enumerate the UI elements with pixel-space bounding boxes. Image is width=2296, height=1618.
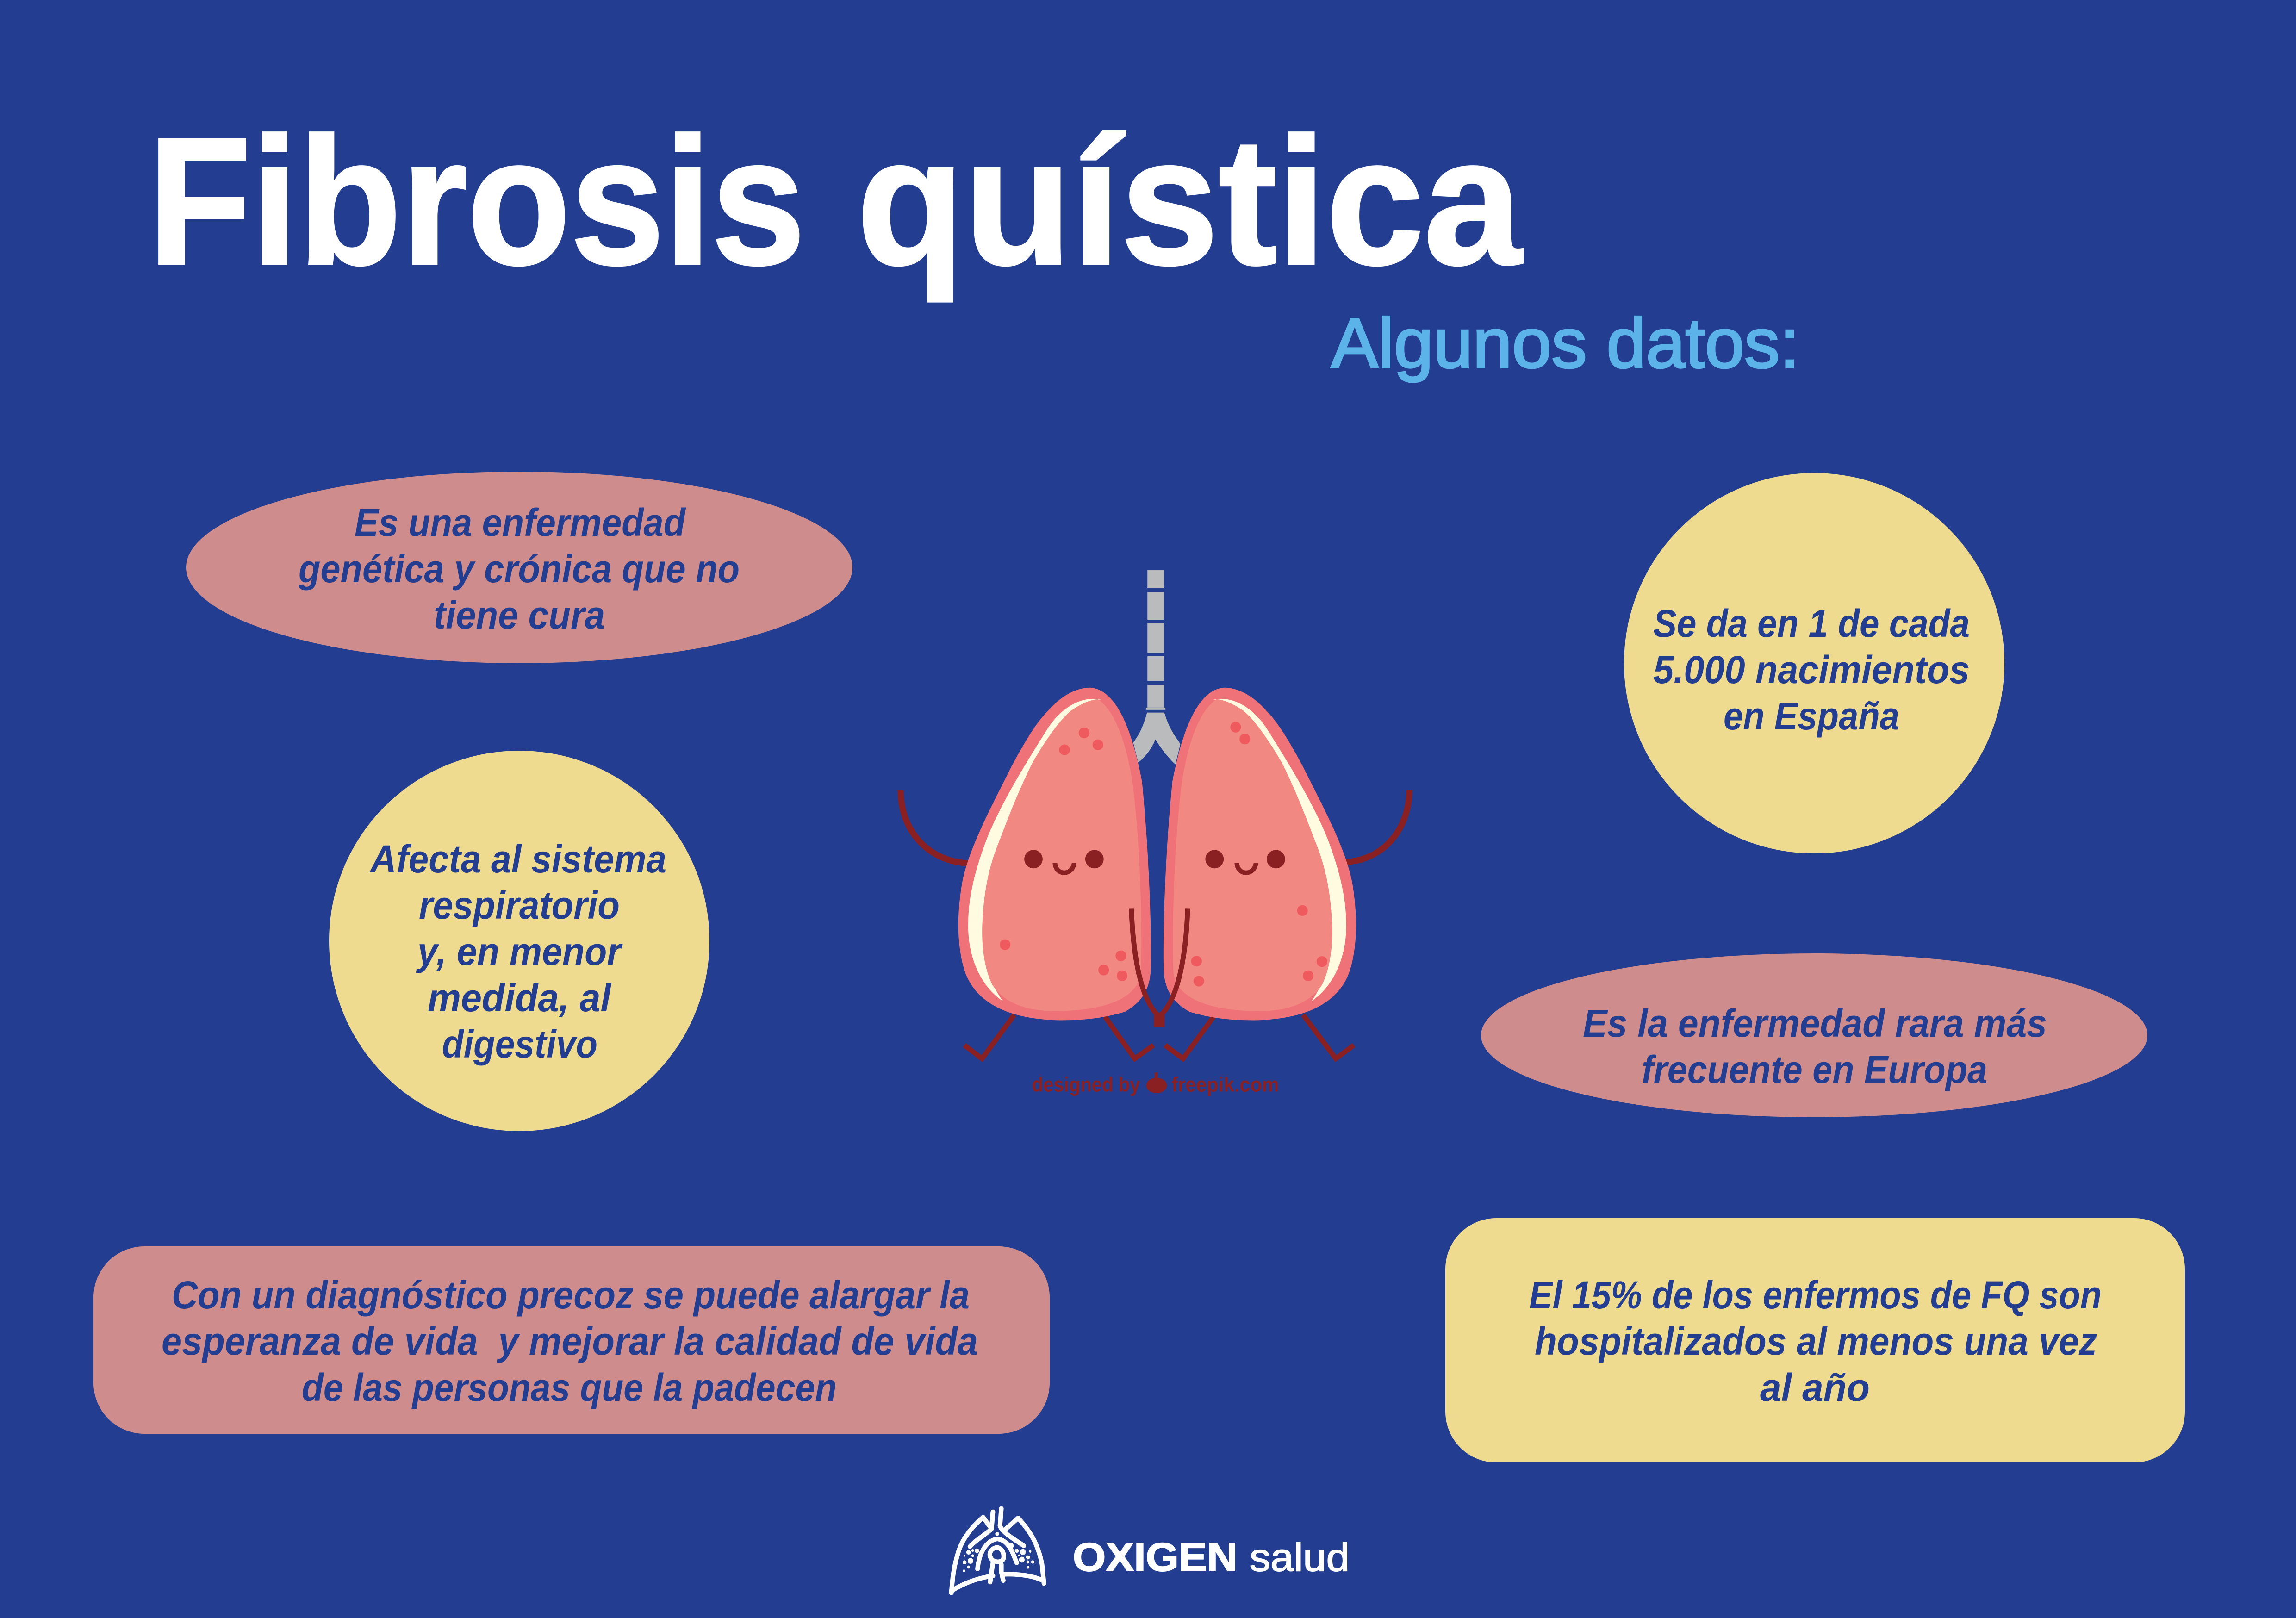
panel: hospitalization: hospitalizados al menos una vez <box>1535 1319 2097 1363</box>
panel: early diagnosis: de las personas que la padecen <box>302 1366 837 1409</box>
trachea <box>1133 570 1181 765</box>
panel: incidence in Spain <box>1624 473 2004 853</box>
subtitle: Algunos datos: <box>1331 304 1799 383</box>
panel: respiratory system: digestivo <box>442 1022 597 1066</box>
bronchi lines <box>1131 908 1188 1027</box>
title <box>148 100 1523 304</box>
watermark: designed by <box>1032 1073 1140 1096</box>
panel: early diagnosis: Con un diagnóstico precoz se puede alargar la <box>172 1273 970 1317</box>
panel: genetic and chronic: genética y crónica que no <box>298 547 740 591</box>
title: Fibrosis <box>148 100 805 302</box>
panel: respiratory system: y, en menor <box>416 930 623 973</box>
panel: rare disease in Europe <box>1481 953 2147 1117</box>
panel: respiratory system: Afecta al sistema <box>369 837 666 881</box>
logo text: OXIGEN <box>1073 1535 1238 1580</box>
panel: genetic and chronic: tiene cura <box>434 593 605 637</box>
logo: Oxigen salud <box>952 1508 1350 1593</box>
panel: hospitalization: al año <box>1760 1366 1870 1409</box>
illustration: smiling lungs <box>901 570 1409 1096</box>
panel: incidence in Spain: 5.000 nacimientos <box>1653 648 1970 691</box>
title: quística <box>857 100 1523 304</box>
panel: incidence in Spain: en España <box>1724 694 1899 738</box>
panel: early diagnosis <box>93 1246 1050 1434</box>
spots <box>1000 722 1327 987</box>
left arm <box>901 790 970 863</box>
panel: incidence in Spain: Se da en 1 de cada <box>1653 602 1970 645</box>
panel: genetic and chronic <box>186 472 852 663</box>
right lung <box>1164 688 1356 1020</box>
panel: hospitalization: El 15% de los enfermos de FQ son <box>1529 1273 2102 1317</box>
right arm <box>1345 790 1409 862</box>
panel: respiratory system <box>329 751 709 1131</box>
panel: rare disease in Europe: frecuente en Europa <box>1642 1048 1987 1091</box>
icon: lungs outline <box>952 1508 1044 1593</box>
panel: respiratory system: respiratorio <box>419 884 620 927</box>
panel: respiratory system: medida, al <box>428 976 612 1020</box>
watermark <box>1032 1072 1279 1096</box>
panel: rare disease in Europe: Es la enfermedad rara más <box>1583 1002 2047 1045</box>
logo text: salud: salud <box>1250 1536 1350 1579</box>
panel: genetic and chronic: Es una enfermedad <box>355 501 686 544</box>
watermark: freepik.com <box>1171 1073 1279 1096</box>
faces <box>1024 850 1285 873</box>
legs <box>964 1015 1354 1058</box>
panel: hospitalization <box>1445 1218 2185 1462</box>
panel: early diagnosis: esperanza de vida y mejorar la calidad de vida <box>162 1319 978 1363</box>
left lung <box>958 688 1151 1020</box>
